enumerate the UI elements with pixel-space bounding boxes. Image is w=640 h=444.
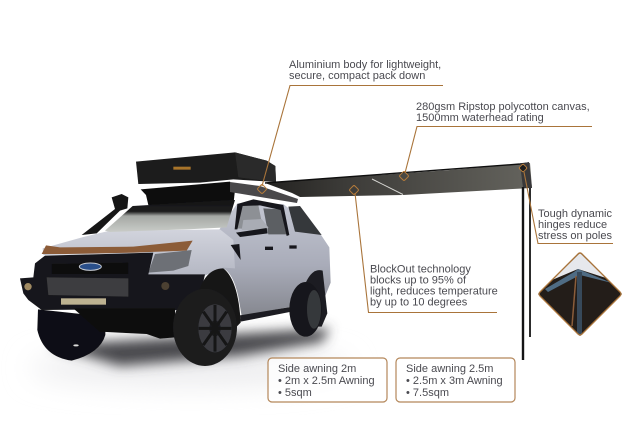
spec box: 2m awning: [268, 358, 387, 402]
spec box: 2m awning: • 5sqm: [278, 387, 312, 399]
callout: aluminium body: Aluminium body for lightweight,: [289, 59, 441, 71]
callout: blockout: [349, 185, 498, 312]
callout: blockout: light, reduces temperature: [370, 286, 498, 298]
front wheel arch: [197, 268, 241, 330]
bull bar and bumper: [20, 253, 205, 318]
rooftop tent bag: [136, 152, 276, 184]
snorkel: [82, 194, 128, 235]
copper bonnet guard: [42, 241, 193, 254]
bonnet: [43, 229, 235, 276]
headlight: [148, 250, 192, 273]
side windows: [237, 205, 263, 230]
mirror: [236, 219, 268, 237]
callout: blockout: BlockOut technology: [370, 264, 471, 276]
spec box: 2.5m awning: • 7.5sqm: [406, 387, 449, 399]
front left wheel: [37, 309, 105, 361]
callout: blockout: by up to 10 degrees: [370, 296, 468, 308]
spec box: 2m awning: • 2m x 2.5m Awning: [278, 375, 375, 387]
callout: aluminium body: [257, 59, 443, 194]
callout: canvas: 1500mm waterhead rating: [416, 112, 544, 124]
hinge detail diamond: [538, 252, 622, 336]
callout: aluminium body: secure, compact pack down: [289, 70, 425, 82]
side step: [240, 306, 297, 322]
spec box: 2.5m awning: [396, 358, 515, 402]
ford badge: [79, 263, 101, 270]
spec box: 2.5m awning: Side awning 2.5m: [406, 363, 493, 375]
awning case: [230, 182, 298, 203]
rear wheel: [289, 282, 322, 337]
canopy window: [288, 206, 322, 235]
vehicle with roof-mounted awning: [20, 152, 331, 366]
windscreen: [105, 200, 235, 232]
callout: blockout: blocks up to 95% of: [370, 274, 467, 286]
rear wheel arch: [300, 270, 327, 327]
callout: hinges: Tough dynamic: [538, 208, 612, 220]
callout: hinges: hinges reduce: [538, 219, 607, 231]
callout: canvas: [399, 101, 592, 181]
roof rack: [141, 182, 235, 205]
awning support poles: [523, 187, 530, 360]
callout: hinges: [519, 164, 613, 244]
front right wheel: [173, 289, 237, 366]
led light bar: [61, 298, 106, 305]
spec box: 2m awning: Side awning 2m: [278, 363, 356, 375]
fog lights: [24, 282, 169, 290]
spec box: 2.5m awning: • 2.5m x 3m Awning: [406, 375, 503, 387]
callout: canvas: 280gsm Ripstop polycotton canvas,: [416, 101, 590, 113]
ground shadow: [30, 328, 350, 386]
awning canvas: [265, 162, 532, 197]
door handles: [231, 244, 297, 260]
callout: hinges: stress on poles: [538, 230, 612, 242]
cab and side panels: [190, 203, 331, 316]
underbody: [73, 308, 175, 339]
